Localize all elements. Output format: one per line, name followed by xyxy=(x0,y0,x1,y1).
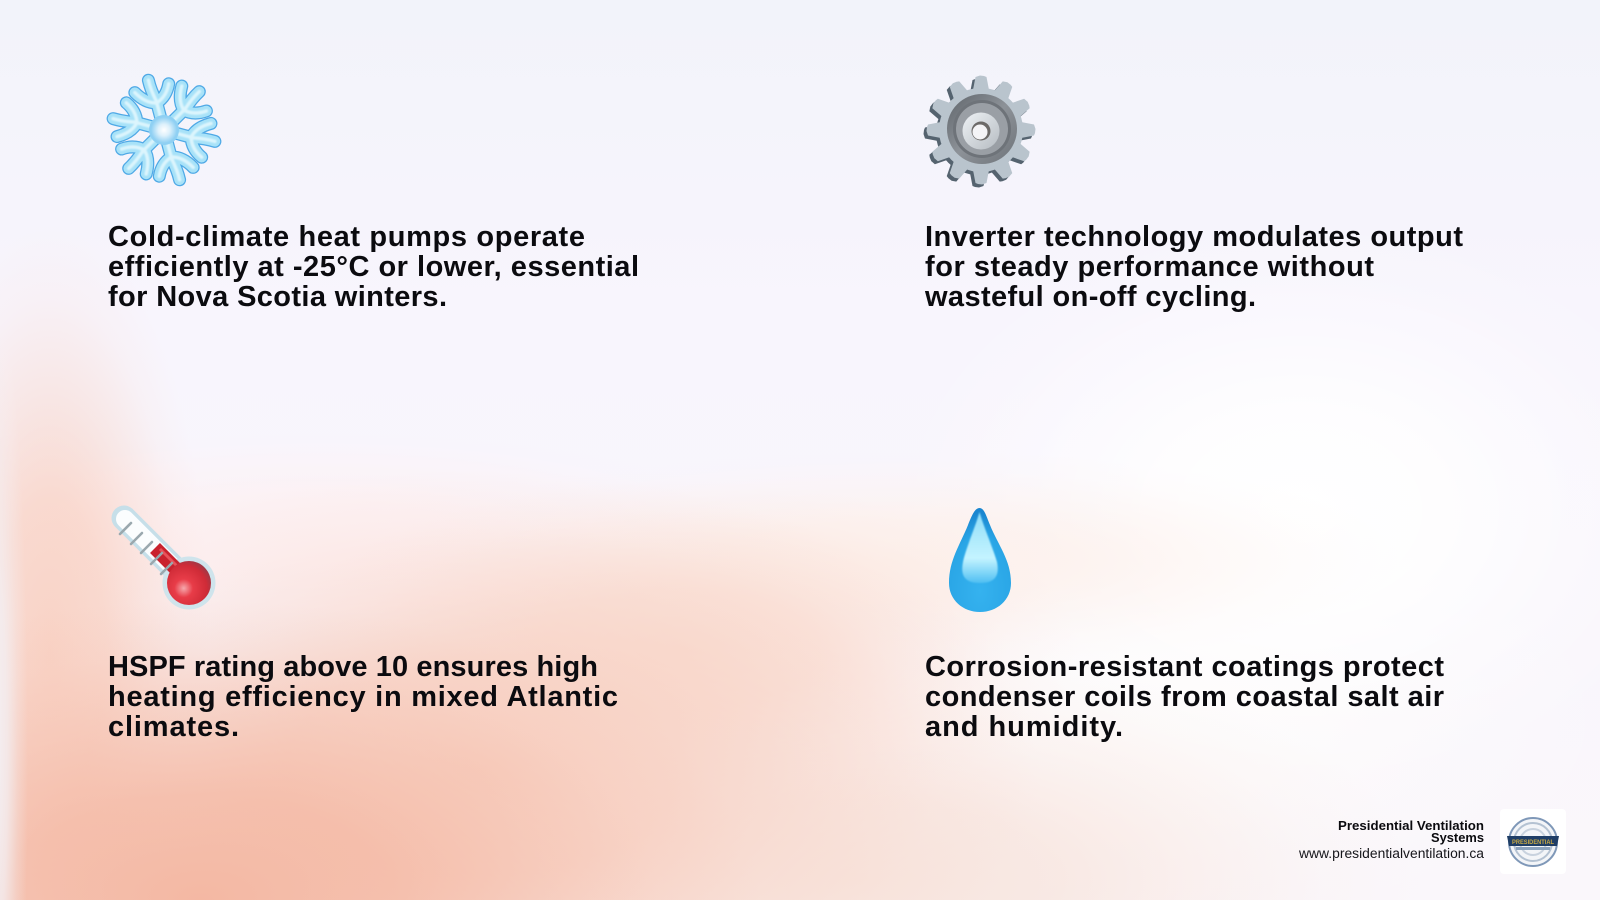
icon: gear xyxy=(924,76,1036,188)
text: inverter statement: for steady performance without xyxy=(925,251,1374,283)
panel: cold-climate operation xyxy=(99,67,639,313)
text: company name and website: Systems xyxy=(1431,830,1484,845)
text: corrosion statement: condenser coils from coastal salt air xyxy=(925,681,1444,713)
text: company name and website: Presidential Ventilation xyxy=(1338,818,1484,833)
panel: corrosion resistance xyxy=(925,508,1444,743)
footer: brand xyxy=(1298,809,1566,874)
text: company name and website xyxy=(1298,818,1484,861)
text: HSPF statement: climates. xyxy=(108,711,239,743)
panel: inverter technology xyxy=(924,76,1463,313)
logo badge: PRESIDENTIAL xyxy=(1512,840,1554,846)
text: cold-climate statement: for Nova Scotia winters. xyxy=(108,281,447,313)
text: inverter statement: wasteful on-off cycling. xyxy=(924,281,1256,313)
logo badge xyxy=(1500,809,1566,874)
text: company name and website: www.presidentialventilation.ca xyxy=(1298,846,1484,861)
text: HSPF statement: HSPF rating above 10 ensures high xyxy=(108,651,598,683)
text: cold-climate statement: efficiently at -25°C or lower, essential xyxy=(108,251,639,283)
text: HSPF statement: heating efficiency in mixed Atlantic xyxy=(108,681,618,713)
icon: water drop xyxy=(949,508,1011,612)
panel: HSPF rating xyxy=(108,518,618,743)
text: corrosion statement: Corrosion-resistant coatings protect xyxy=(925,651,1444,683)
icon: snowflake xyxy=(99,67,229,193)
text: corrosion statement: and humidity. xyxy=(925,711,1123,743)
text: cold-climate statement: Cold-climate heat pumps operate xyxy=(108,221,585,253)
text: inverter statement: Inverter technology modulates output xyxy=(925,221,1463,253)
icon: thermometer xyxy=(120,518,216,610)
